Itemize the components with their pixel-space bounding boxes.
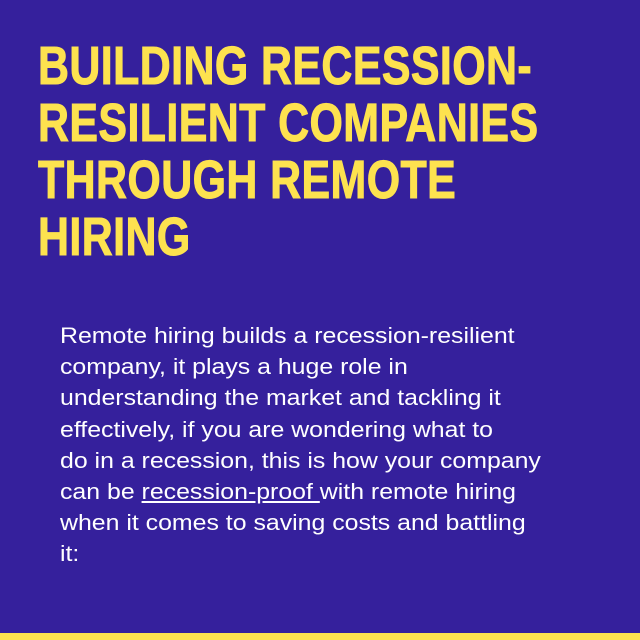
title: HIRING: [38, 207, 191, 267]
body text: [60, 323, 541, 566]
body text: understanding the market and tackling it: [60, 385, 501, 410]
body text: it:: [60, 541, 79, 566]
body text: company, it plays a huge role in: [60, 354, 408, 379]
title: RESILIENT COMPANIES: [38, 93, 539, 153]
title: [38, 36, 539, 267]
body text: Remote hiring builds a recession-resilient: [60, 323, 515, 348]
body text: when it comes to saving costs and battling: [60, 510, 526, 535]
bottom bar: [0, 633, 640, 640]
body text: do in a recession, this is how your company: [60, 448, 541, 473]
title: BUILDING RECESSION-: [38, 36, 532, 96]
body text: can be recession-proof with remote hiring: [60, 479, 516, 504]
body text: effectively, if you are wondering what to: [60, 417, 493, 442]
title: THROUGH REMOTE: [38, 150, 456, 210]
